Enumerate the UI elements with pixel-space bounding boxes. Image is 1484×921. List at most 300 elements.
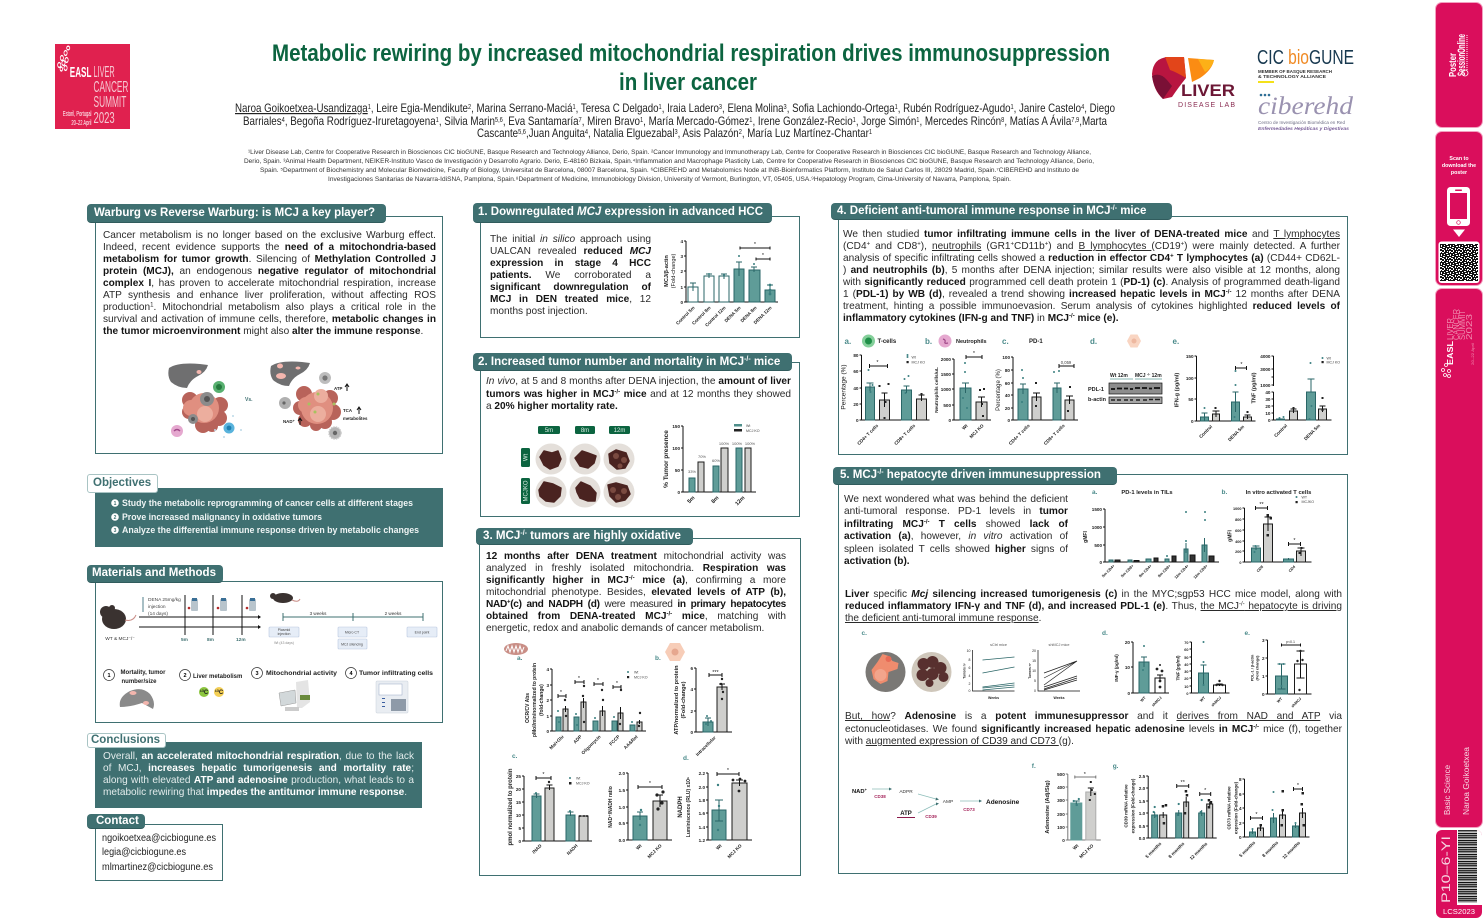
bar chart d: TNF (1176, 641, 1230, 708)
logo: Liver Disease Lab: LIVER (1181, 81, 1235, 100)
bar chart a: OCR: (fold-change) (539, 684, 545, 716)
text: section 2: tumors was higher in MCJ-/- mice and at 12 months they showed (486, 388, 791, 400)
bar chart d: TNF: WT (1199, 695, 1207, 703)
panel: 1. Downregulated MCJ (473, 203, 800, 338)
bar chart b: Neutrophils: Neutrophils cells/uL (934, 367, 940, 413)
sidebar: conference info: Naroa Goikoetxea (1461, 747, 1471, 815)
bar chart e: TNF: MCJ KO (1326, 360, 1340, 364)
text: section 3: mitochondrial phenotype. Besides, elevated levels of ATP (b), (486, 587, 786, 598)
bar chart: tumor presence: 100% (732, 441, 743, 446)
diagram: adenosine pathway: CD39 (925, 814, 937, 819)
bar chart: MCJ expression: 4 (680, 239, 683, 244)
sidebar: Scan to download: Scan to (1449, 156, 1469, 162)
illustration: Warburg vs reverse Warburg tumours: NAD⁺ (283, 419, 295, 424)
bar chart a: T-cells: CD4+ T cells (856, 423, 880, 446)
bar chart c: NAD NADH: 5 (518, 826, 521, 831)
panel: Contact (87, 814, 223, 881)
western blot d: PDL-1: b-actin (1088, 397, 1107, 403)
item 4: tumor infiltrating cells: 4 (349, 671, 353, 677)
logo: CIC bioGUNE: CIC bioGUNE (1257, 47, 1354, 69)
icon: mitochondrion (504, 643, 528, 655)
authors: 2 (739, 129, 742, 136)
bar chart b: ATP: (Fold-change) (681, 681, 687, 718)
bar chart a: OCR: 0 (546, 729, 549, 734)
bar chart d: NADPH: Luminiscence (RLU) x10⁶ (686, 777, 692, 837)
bar chart a: PD-1 levels in TILs: a. (1092, 489, 1098, 496)
heading: section 4 (831, 203, 1172, 220)
text: section 5 intro: We next wondered what was behind the deficient (844, 494, 1068, 505)
western blot d: PDL-1: MCJ (1135, 373, 1146, 379)
bar chart: tumor presence: 70% (698, 454, 706, 459)
diagram: DENA timeline: 12m (236, 637, 246, 643)
panel: Materials and Methods (87, 565, 443, 723)
bar chart: MCJ expression: (Fold-change) (671, 253, 677, 288)
text: section 1: significant downregulation of (490, 282, 651, 293)
bar chart b: In vitro activated T cells: CD8 (1256, 565, 1264, 573)
bar chart c: PD-1: 100 (1002, 355, 1010, 360)
western blot d: PDL-1: PDL-1 (1088, 387, 1104, 393)
icon: down arrow (1453, 230, 1465, 237)
diagram: DENA timeline (100, 595, 261, 643)
authors: 1 (916, 117, 920, 124)
text: section 5 intro (844, 494, 1068, 567)
bar chart a: T-cells: 80 (853, 353, 859, 358)
diagram: orthotopic timeline: MCJ silencing (341, 642, 363, 646)
authors: 1 (895, 104, 898, 111)
bar chart: NAD/NADH ratio: NAD⁺/NADH ratio (608, 786, 614, 828)
bar chart b: In vitro activated T cells: gMFI (1228, 530, 1234, 542)
text: section 1: UALCAN revealed reduced MCJ (490, 246, 651, 257)
bar chart f: Adenosine: 300 (1057, 798, 1065, 803)
bar chart g: CD73 (1226, 777, 1310, 860)
logo: EASL Liver Cancer Summit 2023: EASL (70, 63, 91, 81)
diagram: DENA timeline: 5m (181, 637, 188, 643)
bar chart a: PD-1 levels in TILs: 1000 (1092, 525, 1102, 530)
item 2: liver metabolism: Liver metabolism (193, 674, 242, 680)
logo: EASL Liver Cancer Summit 2023: 20–22 April (71, 120, 91, 128)
sidebar: poster number and barcode: LCS2023 (1443, 907, 1475, 916)
line chart: sCtrl mice: Tumors nº (962, 662, 966, 679)
authors: 1 (436, 117, 439, 124)
heading: Materials and Methods (87, 565, 223, 583)
bar chart f: Adenosine: 400 (1057, 785, 1065, 790)
bar chart f: Adenosine: Wt (1072, 843, 1080, 851)
logo: EASL Liver Cancer Summit 2023: SUMMIT (94, 92, 126, 111)
bar chart a: T-cells: CD8+ T cells (893, 423, 917, 446)
bar chart e: PDL-1: 2 (1262, 656, 1265, 661)
text: Conclusions: Overall, an accelerated mitochondrial respiration, due to the lack (103, 751, 414, 762)
bar chart b: In vitro activated T cells: 200 (1235, 550, 1242, 554)
panel: 4. Deficient anti-tumoral immune response (831, 203, 1348, 455)
bar chart a: OCR: Wt (634, 670, 638, 674)
heading: Contact (87, 814, 145, 829)
bar chart a: T-cells: MCJ KO (912, 360, 925, 364)
heading: Materials and Methods: Materials and Methods (92, 567, 216, 579)
authors: 7 (579, 117, 582, 124)
bar chart c: NAD NADH: 15 (516, 800, 521, 805)
bar chart e: TNF: 40 (1265, 390, 1271, 395)
bar chart a: T-cells: Wt (912, 356, 916, 360)
bar chart c: PD-1: 20 (1005, 406, 1010, 411)
bar chart b: In vitro activated T cells: 0 (1239, 561, 1242, 565)
authors: 5,6 (495, 117, 503, 124)
bar chart: MCJ expression: 3 (680, 254, 683, 259)
sidebar: poster number and barcode (1436, 830, 1482, 918)
bar chart a: OCR: * (560, 690, 563, 696)
bar chart a: T-cells (840, 334, 930, 446)
text: section 3: energetic, redox and anabolic demands of cancer metabolism. (486, 623, 764, 634)
title: in liver cancer (619, 69, 757, 96)
bar chart e: PDL-1: e. (1244, 630, 1250, 637)
authors (235, 101, 1115, 140)
authors: 4 (585, 129, 588, 136)
text: section 5 liver silencing: the deficient anti-tumoral immune response. (845, 613, 1041, 624)
bar chart b: Neutrophils (925, 334, 991, 439)
bar chart e: IFN-g: 100 (1186, 376, 1194, 381)
contact emails: legia@cicbiogune.es (102, 847, 186, 858)
bar chart: tumor presence: 100% (745, 441, 756, 446)
bar chart d: NADPH (678, 755, 752, 859)
text: Warburg paragraph: Cancer metabolism is no longer based on the exclusive Warburg effect. (103, 230, 436, 241)
bar chart c: NAD NADH: * (542, 772, 545, 778)
western blot d: PDL-1: Wt 12m (1110, 373, 1128, 379)
authors: , Eva Santamaría (503, 114, 579, 128)
bar chart d: INF-γ: 0 (1127, 691, 1130, 696)
bar chart b: ATP: 2 (690, 709, 693, 714)
sidebar: conference info: SUMMIT (1458, 310, 1467, 340)
bar chart g: CD39: 5 months (1144, 841, 1163, 859)
bar chart g: CD73: * (1255, 812, 1258, 818)
bar chart a: OCR: * (597, 678, 600, 684)
bar chart e: TNF: 3000 (1260, 367, 1271, 372)
bar chart g: CD39: 2.5 (1139, 774, 1146, 779)
bar chart d: NADPH: d. (683, 755, 689, 762)
bar chart a: OCR: * (616, 681, 619, 687)
line chart: shMCJ mice: 10 (1032, 669, 1036, 673)
authors: 1 (659, 104, 662, 111)
authors: 5,6 (518, 129, 526, 136)
heading: section 5: 5. MCJ-/- hepatocyte driven immunesuppression (840, 469, 1101, 481)
diagram: orthotopic timeline: Wt (43 days) (274, 641, 294, 645)
icon: phone (1447, 187, 1470, 226)
bar chart a: OCR: Mal+Glu (548, 734, 565, 750)
sidebar: Poster Session Online (1436, 3, 1482, 127)
bar chart b: In vitro activated T cells: WT (1302, 496, 1308, 500)
bar chart: NAD/NADH ratio: 0.5 (619, 821, 625, 826)
panel: 3. Highly oxidative (476, 528, 801, 876)
bar chart c: PD-1: CD4+ T cells (1008, 423, 1031, 446)
line chart: sCtrl mice: 10 (967, 649, 971, 653)
bar chart: tumor presence: 12m (734, 495, 746, 507)
bar chart a: OCR: ADP (572, 734, 583, 745)
authors: Cascante (477, 126, 528, 140)
line chart: shMCJ mice: 0 (1034, 689, 1036, 693)
authors: 1 (1011, 104, 1014, 111)
heading: section 2 (473, 353, 792, 371)
bar chart g: CD73: CD73 mRNA relative (1226, 786, 1232, 830)
bar chart b: Neutrophils: 1500 (941, 372, 951, 377)
affiliations: ¹Liver Disease Lab, Centre for Cooperative Research in Biosciences CIC bioGUNE, Basque Research and Technology Alliance, Derio, Spain. ²Cancer Immunology and Immunotherapy Lab, Centre for Cooperative Research in Biosciences CIC bioGUNE, Basque Research and Technology Alliance, (248, 150, 1091, 156)
bar chart b: Neutrophils: 0 (948, 418, 951, 423)
text: Conclusions: of MCJ, increases hepatic tumorigenesis and mortality rate; (103, 763, 414, 774)
bar chart e: TNF: 30 (1265, 397, 1271, 402)
text: Conclusions: metabolic rewiring that impedes the antitumor immune response. (103, 787, 407, 798)
sidebar: conference info (1436, 289, 1482, 827)
panel: Warburg vs Reverse Warburg (87, 204, 443, 454)
line chart: sCtrl mice: 6 (969, 666, 971, 670)
bar chart b: In vitro activated T cells: MCJKO (1302, 500, 1314, 504)
item 1: mortality, tumor number/size: Mortality, tumor (121, 670, 166, 676)
heading: section 5 (833, 467, 1117, 485)
item 3: mitochondrial activity (252, 668, 338, 711)
bar chart f: Adenosine: f. (1032, 763, 1036, 770)
item 1: mortality, tumor number/size (104, 670, 166, 709)
bar chart: tumor presence: 33% (688, 469, 696, 474)
heading: Objectives (87, 474, 158, 493)
bar chart: tumor presence: 5m (687, 495, 696, 505)
text: section 4: treatment, hinting a possible immunoevasion. Serum analysis of cytokines highlighted reduced levels of (843, 301, 1340, 312)
item 4: tumor infiltrating cells (346, 668, 434, 713)
bar chart: MCJ expression: Control 5m (675, 305, 696, 326)
bar chart a: PD-1 levels in TILs: 8m CD8+ (1157, 563, 1172, 578)
bar chart e: PDL-1 (1244, 630, 1312, 709)
authors: , Matías A Ávila (1004, 113, 1072, 128)
bar chart e: PDL-1: 0 (1262, 692, 1265, 697)
authors: 2 (468, 104, 471, 111)
bar chart b: ATP: ATP/normalized to protein (674, 665, 680, 735)
western blot d: PDL-1: 12m (1150, 373, 1162, 379)
bar chart: MCJ expression: DENA 5m (723, 305, 742, 323)
bar chart: tumor presence: MCJ KO (746, 429, 760, 433)
bar chart d: NADPH: NADPH (678, 796, 684, 818)
authors: , Natalia Elguezabal (588, 126, 674, 140)
diagram: orthotopic timeline: Plasmid (278, 628, 290, 632)
heading: section 2: 2. Increased tumor number and mortality in MCJ-/- mice (478, 355, 780, 368)
text: Warburg paragraph: the tumor microenvironment might also alter the immune response. (103, 326, 423, 337)
authors: , María Mercado-Gómez (643, 114, 749, 128)
affiliations: Investigaciones Sanitarias de Navarra-IdiSNA, Pamplona, Spain.⁸Department of Medicine, Immunobiology Division, University of Vermont, Burlington, VT, 05405, USA.⁹Hepatology Program, Cima-University of Navarra, Pamplona, Spain. (328, 176, 1011, 183)
sidebar: poster number and barcode: P10–6-YI (1439, 836, 1453, 903)
bar chart: tumor presence: 50 (675, 468, 680, 473)
bar chart b: Neutrophils: 2000 (941, 357, 951, 362)
objectives list: Study the metabolic reprogramming of cancer cells at different stages (122, 497, 413, 508)
bar chart b: ATP: b. (655, 655, 661, 662)
bar chart b: ATP (655, 655, 732, 757)
bar chart c: NAD NADH: Wt (576, 776, 580, 780)
text: section 3: 12 months after DENA treatment mitochondrial activity was (486, 551, 786, 562)
bar chart a: OCR: 4 (546, 667, 549, 672)
text: Warburg paragraph: complex I, has proven to accelerate mitochondrial respiration, increase (103, 278, 436, 289)
text: section 2 (486, 376, 791, 412)
heading: Conclusions (87, 733, 166, 748)
diagram: adenosine pathway: CD38 (874, 794, 886, 799)
text: section 5 intro: spleen isolated T cells showed higher signs of (844, 544, 1068, 555)
bar chart f: Adenosine: 0 (1062, 838, 1065, 843)
photos c: tumor livers (862, 630, 952, 692)
authors: , Asis Palazón (678, 126, 739, 140)
photos: liver plates: 5m (545, 428, 553, 434)
bar chart e: TNF: Control (1273, 423, 1288, 438)
bar chart b: Neutrophils: Neutrophils (956, 339, 987, 345)
item 2: liver metabolism: 2 (183, 673, 187, 679)
bar chart f: Adenosine: 500 (1057, 772, 1065, 777)
bar chart a: OCR: MCJ KO (634, 676, 648, 680)
text: Warburg paragraph: production1. Mitochondrial metabolism also plays a critical role in the (103, 302, 436, 313)
bar chart a: PD-1 levels in TILs: 8m CD4+ (1138, 563, 1153, 578)
authors: 1 (640, 117, 643, 124)
authors: , Rubén Rodríguez-Agudo (898, 101, 1011, 115)
bar chart d: INF-γ: 20 (1125, 640, 1130, 645)
bar chart c: NAD NADH: 20 (516, 787, 521, 792)
text: section 4 (843, 229, 1340, 324)
bar chart c: NAD NADH: 0 (518, 839, 521, 844)
bar chart a: OCR: 1 (546, 714, 549, 719)
diagram: DENA timeline: WT & MCJ⁻/⁻ (105, 636, 135, 642)
bar chart c: PD-1: Percentage (%) (996, 369, 1002, 411)
logo: EASL Liver Cancer Summit 2023: CANCER (94, 77, 128, 96)
bar chart: NAD/NADH ratio: 0.0 (619, 838, 625, 843)
bar chart g: CD39: 0.0 (1139, 836, 1146, 841)
icon: hepatocyte (665, 643, 685, 661)
diagram: adenosine pathway: CD73 (963, 807, 975, 812)
authors: 4 (1081, 104, 1084, 111)
bar chart g: CD73: 4 (1239, 806, 1242, 811)
line chart: shMCJ mice: 5 (1034, 679, 1036, 683)
bar chart g: CD73: 8 months (1261, 840, 1280, 858)
bar chart b: Neutrophils: b. (925, 337, 932, 346)
sidebar: conference info: Basic Science (1442, 765, 1452, 815)
bar chart b: In vitro activated T cells: 1000 (1233, 507, 1242, 511)
objectives list: 3 (114, 528, 117, 534)
panel: Objectives (87, 474, 443, 547)
title: Metabolic rewiring by increased mitochondrial respiration drives immunosuppression (272, 40, 1110, 67)
text: section 1: months post injection. (490, 306, 588, 317)
text: section 4: ) and neutrophils (b), 5 months after DENA injection; similar results were also visible at 12 months, along (843, 265, 1340, 276)
authors: , Miren Bravo (582, 114, 640, 128)
bar chart f: Adenosine: MCJ KO (1078, 843, 1095, 859)
bar chart g: CD39 (1113, 763, 1217, 861)
bar chart g: CD39: 1.0 (1139, 811, 1146, 816)
authors: 1 (853, 117, 856, 124)
logo: EASL Liver Cancer Summit 2023 (55, 44, 130, 129)
line chart: sCtrl mice: Weeks (988, 696, 999, 700)
bar chart a: OCR: pMol/min/normalized to protein (532, 663, 538, 737)
text: section 5 adenosine: ectonucleotidases. We found significantly increased hepatic adenosine levels in MCJ-/- mice (f), together (845, 724, 1342, 734)
sidebar: conference info: 20–22 April (1471, 343, 1475, 365)
bar chart d: NADPH: Wt (715, 843, 723, 851)
bar chart a: T-cells: * (876, 360, 879, 366)
panel: 2. Increased tumor number (473, 353, 800, 517)
diagram: orthotopic timeline: 2 weeks (385, 611, 402, 616)
line chart: shMCJ mice (1028, 643, 1080, 700)
authors: 4 (282, 117, 285, 124)
bar chart d: TNF: TNF (pg/ml) (1176, 655, 1180, 680)
bar chart: NAD/NADH ratio: 2.0 (619, 771, 625, 776)
photos: liver plates: 8m (581, 428, 589, 434)
item 2: liver metabolism (180, 670, 242, 697)
text: section 5 liver silencing: reduced inflammatory IFN-γ and TNF (d), and increased PDL-1 (e). Thus, the MCJ-/- hepatocyte is driving (845, 601, 1342, 612)
authors: , Irene González-Recio (752, 114, 853, 128)
bar chart a: T-cells: 40 (853, 386, 859, 391)
line chart: shMCJ mice: Tumors nº (1028, 662, 1032, 679)
bar chart b: In vitro activated T cells: b. (1222, 489, 1227, 496)
item 1: mortality, tumor number/size: 1 (107, 673, 111, 679)
bar chart b: In vitro activated T cells: CD4 (1288, 564, 1297, 573)
bar chart d: TNF: 70 (1184, 641, 1188, 645)
bar chart a: T-cells: Percentage (%) (840, 364, 848, 410)
logo: CIC bioGUNE: & TECHNOLOGY ALLIANCE (1258, 74, 1327, 80)
bar chart a: OCR: AA&Rot (623, 734, 639, 750)
western blot d: PDL-1 (1088, 334, 1162, 404)
bar chart: tumor presence: 100 (672, 446, 680, 451)
heading: section 3: 3. MCJ-/- tumors are highly oxidative (483, 529, 681, 542)
bar chart a: PD-1 levels in TILs: 12m CD4+ (1174, 563, 1190, 580)
authors: Naroa Goikoetxea-Usandizaga (235, 101, 368, 115)
heading: section 3 (476, 528, 693, 545)
logo: Liver Disease Lab: DISEASE LAB (1178, 102, 1235, 109)
bar chart: tumor presence: 8m (711, 495, 720, 505)
line chart: sCtrl mice (962, 643, 1014, 700)
diagram: adenosine pathway: NAD (852, 789, 865, 795)
bar chart a: PD-1 levels in TILs: PD-1 levels in TILs (1121, 490, 1173, 496)
diagram: orthotopic timeline (269, 593, 437, 649)
bar chart e: TNF: TNF (pg/ml) (1252, 372, 1258, 404)
text: section 5 intro: anti-tumoral response. PD-1 levels in tumor (844, 506, 1068, 517)
bar chart: MCJ expression: MCJ/β-actin (664, 255, 670, 287)
text: section 1 (490, 234, 651, 317)
sidebar: conference info: LIVER (1446, 318, 1455, 340)
heading: section 4: 4. Deficient anti-tumoral immune response in MCJ-/- mice (837, 205, 1146, 217)
affiliations: Spain. ⁵Department of Biochemistry and Molecular Biomedicine, Faculty of Biology, Universitat de Barcelona, 08007 Barcelona, Spain. ⁶CIBEREHD and Metabolomics Node at INB-Bioinformatics Platform, Instituto de Salud Carlos III, 28029 Madrid, Spain.⁷CIBEREHD and Instituto de (260, 167, 1080, 174)
bar chart g: CD39: 0.5 (1139, 824, 1146, 829)
illustration: Warburg vs reverse Warburg tumours: Vs. (245, 397, 253, 403)
bar chart d: INF-γ (1102, 630, 1169, 708)
authors: , Iraia Ladero (662, 101, 719, 115)
bar chart a: PD-1 levels in TILs: 5m CD8+ (1120, 563, 1135, 578)
text: section 4: We then studied tumor infiltrating immune cells in the liver of DENA-treated mice and T lymphocytes (843, 229, 1340, 240)
bar chart g: CD39: CD39 mRNA relative (1124, 784, 1129, 828)
bar chart f: Adenosine: * (1084, 772, 1087, 778)
authors: , María Luz Martínez-Chantar (742, 126, 869, 140)
bar chart: MCJ expression: * (754, 242, 757, 248)
bar chart e: IFN-g: Control (1198, 424, 1213, 439)
diagram: adenosine pathway (852, 788, 1020, 819)
bar chart: NAD/NADH ratio: * (649, 781, 652, 787)
affiliations: Derio, Spain. ³Animal Health Department, NEIKER-Instituto Vasco de Investigación y Desarrollo Agrario. Derio, E-48160 Bizkaia, Spain.⁴Inflammation and Macrophage Plasticity Lab, Centre for Cooperative Research in Biosciences CIC bioGUNE, Basque Research and Technology Alliance, Derio, (244, 158, 1094, 165)
bar chart d: TNF: 20 (1184, 677, 1188, 681)
text: section 1: expression in stage 4 HCC (490, 258, 651, 269)
bar chart e: IFN-g: 0 (1191, 419, 1194, 424)
bar chart g: CD73: 5 months (1238, 840, 1257, 858)
bar chart g: CD73: expresion (Fold-change) (1234, 781, 1238, 834)
bar chart d: TNF: 0 (1186, 692, 1188, 696)
text: Conclusions (103, 751, 414, 798)
bar chart g: CD39: * (1204, 788, 1207, 794)
bar chart c: NAD NADH (508, 753, 592, 856)
photos: liver plates: MCJKO (524, 480, 530, 502)
logo: ciberehd: Enfermedades Hepáticas y Digestivas (1258, 126, 1349, 131)
photos: liver plates: Wt (524, 454, 530, 461)
bar chart: MCJ expression (664, 239, 778, 328)
text: Warburg paragraph (103, 230, 436, 337)
bar chart c: NAD NADH: MCJ KO (576, 782, 590, 786)
bar chart d: TNF: 60 (1184, 648, 1188, 652)
contact emails (102, 833, 216, 873)
text: Warburg paragraph: ATP synthesis and enhance liver proliferation, without affecting ROS (103, 290, 436, 301)
bar chart a: T-cells: 20 (853, 402, 859, 407)
authors: 3 (674, 129, 678, 136)
item 4: tumor infiltrating cells: Tumor infiltrating cells (359, 671, 434, 677)
